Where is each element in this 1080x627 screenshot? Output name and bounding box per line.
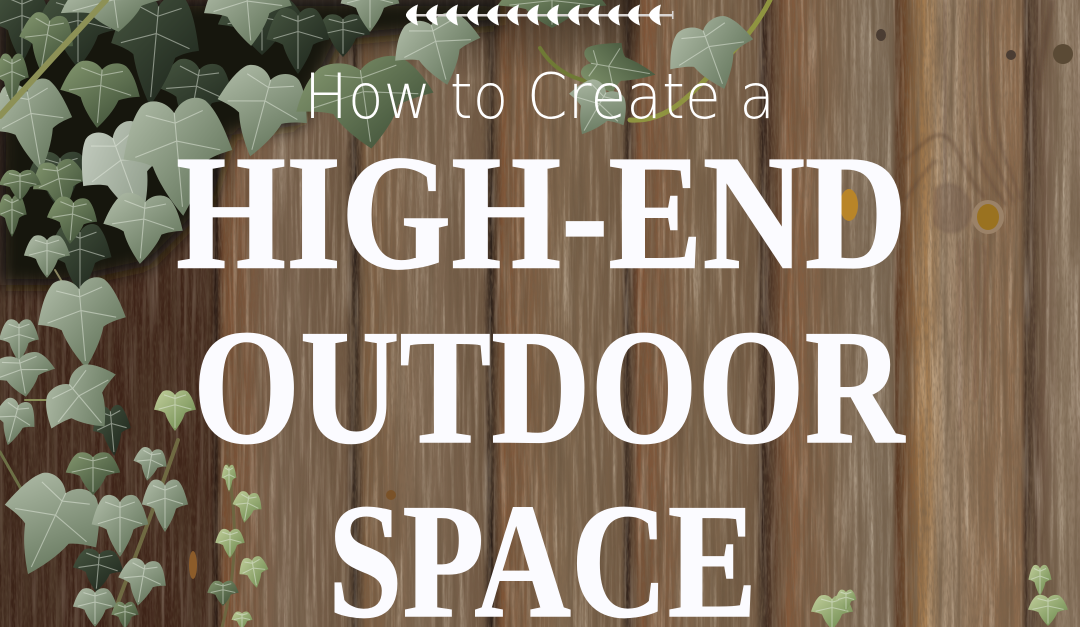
dark foliage shadow <box>0 0 500 285</box>
title line 2: OUTDOOR <box>193 297 905 478</box>
ivy cluster: lower left <box>0 275 196 627</box>
ornament: arrow divider <box>406 4 674 26</box>
ivy sprig: bottom right <box>811 565 1068 627</box>
title line 1: HIGH-END <box>176 122 907 304</box>
ivy stems <box>0 0 770 627</box>
ivy cluster: top centre <box>290 0 766 158</box>
wood knots <box>189 29 1073 579</box>
subtitle: How to Create a <box>304 60 775 133</box>
ivy cluster: top left <box>0 0 399 294</box>
ivy cluster: small sprig <box>207 465 271 627</box>
